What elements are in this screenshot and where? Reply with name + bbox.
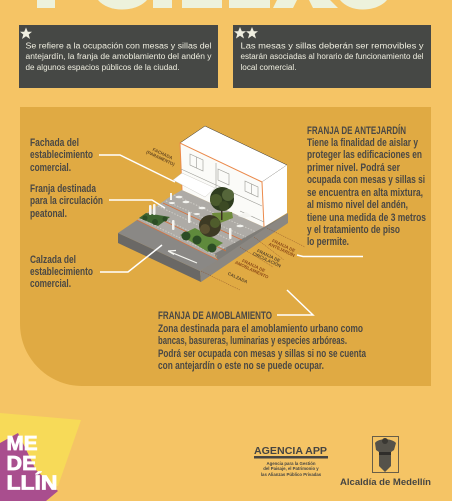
text block: franja peatonal: para la circulación	[30, 195, 103, 207]
road arrow	[168, 250, 197, 263]
illustration: isometric street section	[118, 126, 288, 282]
awning	[173, 173, 215, 197]
pedestrians and furniture	[149, 193, 252, 239]
logo: Medellin: DE	[6, 453, 36, 475]
note box: double asterisk: local comercial.	[240, 63, 296, 72]
text block: franja de antejardin: lo permite.	[307, 236, 349, 248]
shrubs	[142, 216, 216, 252]
panel: diagram background	[20, 107, 431, 386]
text block: calzada	[30, 254, 93, 290]
logo: Agencia APP: del Paisaje, el Patrimonio y	[263, 466, 319, 471]
logo: Agencia APP: Agencia para la Gestión	[267, 461, 316, 466]
text block: franja de amoblamiento: con antejardín o este no se puede ocupar.	[158, 360, 324, 372]
text block: fachada: establecimiento	[30, 149, 93, 161]
text block: fachada: Fachada del	[30, 137, 79, 149]
text block: franja de antejardin: al mismo nivel del andén,	[307, 199, 408, 211]
windows and floor lines	[181, 154, 264, 222]
text block: franja de antejardin: y el tratamiento de piso	[307, 224, 400, 236]
logo: Medellin: LLÍN	[6, 472, 58, 494]
logo: Agencia APP: las Alianzas Público Privadas	[261, 472, 322, 477]
building roof	[180, 126, 287, 182]
label: franja de antejardin: FRANJA DE	[271, 238, 296, 253]
tree: front	[199, 215, 221, 237]
logo: Medellin: ME	[6, 433, 38, 455]
callout line: antejardin	[297, 255, 363, 256]
logo: Alcaldia de Medellin	[340, 436, 431, 487]
label: franja de amoblamiento: FRANJA DE	[241, 258, 266, 273]
text block: calzada: Calzada del	[30, 254, 76, 266]
text block: franja de amoblamiento: Podrá ser ocupada con mesas y sillas si no se cuenta	[158, 348, 367, 360]
callout line: circulacion	[109, 200, 165, 208]
note box: single asterisk: Se refiere a la ocupación con mesas y sillas del	[26, 42, 212, 50]
facade orange outline	[180, 143, 264, 227]
planter	[139, 213, 170, 226]
callout line: fachada	[99, 155, 175, 182]
front garden	[180, 228, 223, 252]
label: fachada (paramento): (PARAMENTO)	[145, 149, 176, 167]
logo: Medellin	[0, 413, 81, 501]
back garden	[212, 212, 233, 225]
note box: single asterisk: antejardín, la franja de amoblamiento del andén y	[26, 52, 212, 61]
orange strip lines	[137, 203, 242, 260]
label: franja de antejardin: ANTEJARDÍN	[268, 241, 296, 258]
text block: fachada: comercial.	[30, 162, 71, 174]
callout line: calzada	[100, 245, 162, 272]
label: franja de circulacion: FRANJA DE	[256, 248, 281, 263]
label: franja de circulacion: CIRCULACIÓN	[252, 251, 282, 268]
note box: double asterisk	[233, 25, 431, 88]
text block: franja peatonal: Franja destinada	[30, 183, 97, 195]
text block: franja de antejardin: se encuentra en alta mixtura,	[307, 187, 423, 199]
callout line: amoblamiento	[277, 290, 313, 315]
note box: single asterisk: de algunos espacios públicos de la ciudad.	[26, 63, 180, 72]
platform base	[118, 213, 288, 282]
text block: calzada: comercial.	[30, 278, 71, 290]
text block: franja de amoblamiento	[158, 310, 367, 372]
note box: single asterisk	[19, 25, 218, 88]
text block: franja de amoblamiento: bancas, basureras, luminarias y especies arbóreas.	[158, 335, 347, 347]
text block: franja de amoblamiento: Zona destinada para el amoblamiento urbano como	[158, 323, 363, 335]
text block: franja peatonal	[30, 183, 103, 220]
label: calzada: CALZADA	[227, 271, 249, 285]
dimension lines	[201, 228, 305, 290]
note box: double asterisk: Las mesas y sillas deberán ser removibles y	[240, 42, 424, 50]
logo: Alcaldia de Medellin: Alcaldía de Medellín	[340, 477, 431, 487]
text block: franja de antejardin: Tiene la finalidad de aislar y	[307, 137, 418, 149]
logo: Agencia APP	[254, 445, 328, 477]
sidewalk paving	[137, 190, 264, 260]
text block: franja de antejardin	[307, 124, 426, 248]
text block: calzada: establecimiento	[30, 266, 93, 278]
text block: fachada	[30, 137, 93, 174]
text block: franja de antejardin: primer nivel. Podrá ser	[307, 162, 401, 174]
text block: franja de antejardin: FRANJA DE ANTEJARDÍN	[307, 124, 406, 137]
text block: franja de amoblamiento: FRANJA DE AMOBLAMIENTO	[158, 310, 272, 322]
note box: double asterisk: estarán asociadas al horario de funcionamiento del	[240, 52, 424, 61]
road	[118, 220, 218, 271]
title: cropped large letters	[37, 0, 387, 10]
logo: Agencia APP: AGENCIA APP	[254, 445, 327, 457]
building facade	[180, 143, 264, 227]
label: franja de amoblamiento: AMOBLAMIENTO	[234, 260, 270, 280]
label: fachada (paramento): FACHADA	[152, 147, 174, 161]
tree: back	[210, 187, 234, 220]
paving texture	[141, 195, 256, 256]
right curb strip	[214, 213, 288, 260]
building side wall	[262, 165, 287, 227]
text block: franja de antejardin: proteger las edificaciones en	[307, 149, 422, 161]
text block: franja peatonal: peatonal.	[30, 208, 67, 220]
